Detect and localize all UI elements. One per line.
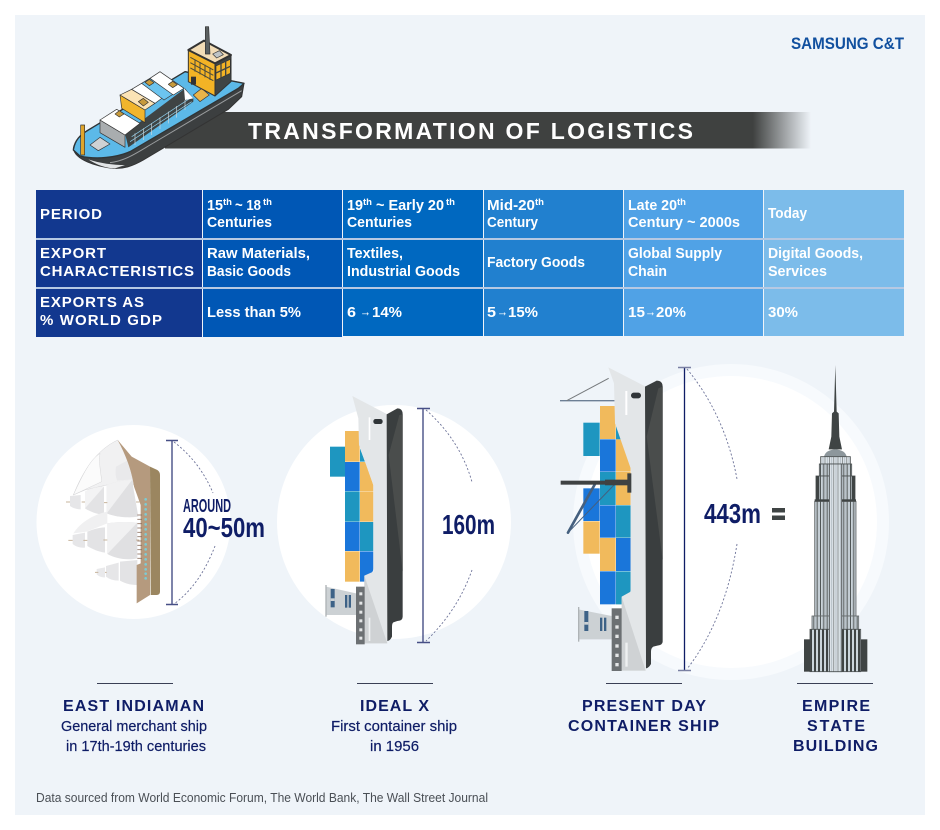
caption: present day container ship — [568, 683, 719, 735]
row: period: th — [263, 197, 272, 207]
row: period: Centuries — [347, 214, 412, 231]
logo: Samsung C&T: SAMSUNG C&T — [791, 34, 905, 53]
caption: Ideal X: First container ship — [331, 718, 457, 735]
measure: present day ship length — [678, 367, 785, 671]
row: period: PERIOD — [40, 206, 102, 223]
row: exports as % of world GDP: 5 — [487, 304, 496, 321]
row: export characteristics: CHARACTERISTICS — [40, 263, 194, 280]
row: period — [40, 197, 808, 231]
row: period: Century — [487, 214, 539, 231]
row: exports as % of world GDP: 15 — [628, 304, 645, 321]
row: period: th — [535, 197, 544, 207]
row: exports as % of world GDP: → — [645, 304, 656, 319]
caption: Empire State Building: BUILDING — [793, 738, 878, 755]
row: export characteristics: Raw Materials, — [207, 245, 310, 262]
icon: isometric cargo ship — [73, 27, 244, 168]
icon: Empire State Building — [804, 365, 867, 672]
row: period: Today — [768, 205, 808, 222]
row: period: Mid-20 — [487, 197, 535, 214]
caption: East Indiaman: General merchant ship — [61, 718, 207, 735]
row: export characteristics: Factory Goods — [487, 254, 585, 271]
title: TRANSFORMATION OF LOGISTICS — [248, 118, 693, 144]
row: export characteristics: Industrial Goods — [347, 263, 460, 280]
row: exports as % of world GDP: Less than 5% — [207, 304, 301, 321]
row: exports as % of world GDP: 20% — [656, 304, 686, 321]
row: export characteristics: Digital Goods, — [768, 245, 863, 262]
ship: Ideal X — [325, 396, 403, 644]
row header column — [36, 190, 202, 337]
row: period: 15 — [207, 197, 223, 214]
measure: East Indiaman length — [166, 440, 265, 605]
row: period: th — [363, 197, 372, 207]
caption: Ideal X: in 1956 — [370, 738, 419, 755]
caption: Ideal X — [331, 683, 457, 755]
row: period: ~ Early 20 — [376, 197, 444, 214]
row: period: Century ~ 2000s — [628, 214, 740, 231]
source note: Data sourced from World Economic Forum, The World Bank, The Wall Street Journal — [36, 791, 488, 805]
row: period: th — [677, 197, 686, 207]
row: period: ~ 18 — [235, 197, 261, 214]
row: exports as % of world GDP: → — [497, 304, 508, 319]
circle: present day backdrop — [573, 364, 889, 680]
label: around 40~50m: AROUND — [183, 496, 231, 516]
caption: present day container ship: PRESENT DAY — [582, 698, 706, 715]
row: export characteristics: Global Supply — [628, 245, 723, 262]
caption: Empire State Building: EMPIRE — [802, 698, 870, 715]
ship: East Indiaman — [66, 440, 160, 603]
caption: Empire State Building: STATE — [807, 718, 865, 735]
row: export characteristics: Basic Goods — [207, 263, 291, 280]
row: export characteristics — [40, 245, 863, 280]
circle: Ideal X backdrop — [277, 405, 511, 639]
caption: East Indiaman — [61, 683, 207, 755]
caption: Ideal X: IDEAL X — [360, 698, 429, 715]
row: period: th — [223, 197, 232, 207]
row: exports as % of world GDP: 15% — [508, 304, 538, 321]
table: export history — [36, 190, 904, 337]
row: export characteristics: EXPORT — [40, 245, 106, 262]
caption: Empire State Building — [793, 683, 878, 755]
row: export characteristics: Textiles, — [347, 245, 403, 262]
row: exports as % of world GDP: % WORLD GDP — [40, 312, 162, 329]
label: around 40~50m — [183, 496, 265, 543]
ship: present day container ship — [560, 367, 663, 671]
label: 160m: 160m — [442, 509, 495, 540]
row: export characteristics: Chain — [628, 263, 667, 280]
row: exports as % of world GDP: 6 — [347, 304, 356, 321]
caption: East Indiaman: in 17th-19th centuries — [66, 738, 206, 755]
label: 443m =: 443m — [704, 498, 761, 529]
circle: East Indiaman backdrop — [36, 425, 230, 619]
row: export characteristics: Services — [768, 263, 827, 280]
row: exports as % of world GDP: 30% — [768, 304, 798, 321]
row: exports as % of world GDP — [40, 294, 798, 329]
row: exports as % of world GDP: EXPORTS AS — [40, 294, 144, 311]
row: exports as % of world GDP: → — [360, 304, 371, 319]
measure: Ideal X length — [417, 408, 495, 643]
title banner — [165, 112, 811, 148]
row: period: Late 20 — [628, 197, 677, 214]
caption: East Indiaman: EAST INDIAMAN — [63, 698, 204, 715]
row: period: th — [446, 197, 455, 207]
row: period: 19 — [347, 197, 363, 214]
row: period: Centuries — [207, 214, 272, 231]
row: exports as % of world GDP: 14% — [372, 304, 402, 321]
caption: present day container ship: CONTAINER SHIP — [568, 718, 719, 735]
label: around 40~50m: 40~50m — [183, 512, 265, 543]
